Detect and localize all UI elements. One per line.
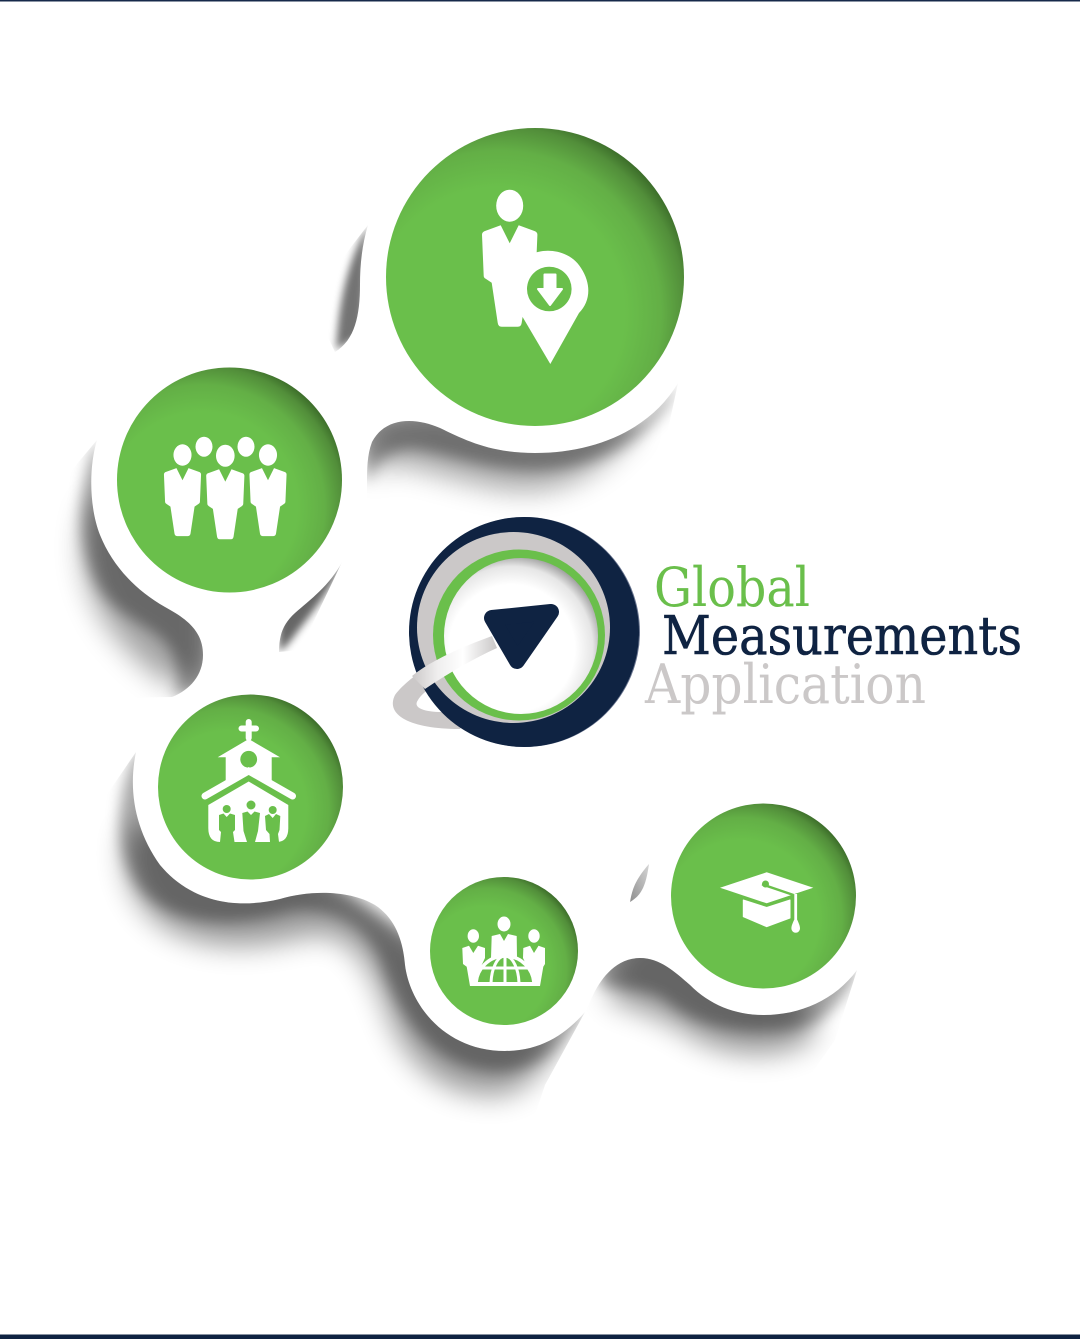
gray ring	[417, 532, 610, 723]
icon: church with congregation	[205, 722, 292, 842]
white inner disc	[444, 558, 598, 714]
panel: top circle, person with location pin	[386, 128, 684, 426]
navy ring	[409, 517, 639, 747]
icon: person with location pin	[482, 190, 588, 364]
swoosh over ring	[412, 636, 497, 689]
panel: left circle, group of people	[117, 368, 342, 592]
word: Measurements: Measurements	[662, 606, 1022, 667]
icon: people around globe	[462, 916, 545, 986]
panel: small circle, meeting around globe	[430, 877, 578, 1025]
word: Application: Application	[644, 653, 926, 716]
green ring	[433, 550, 605, 720]
word: Global: Global	[654, 556, 810, 619]
icon: graduation cap	[720, 872, 813, 933]
title text	[644, 556, 1022, 716]
top border line	[0, 0, 1080, 2]
panel: church circle	[158, 694, 343, 880]
triangle pointer	[492, 612, 551, 661]
paper ribbon shadows	[81, 225, 857, 1095]
swoosh tail behind ring	[393, 637, 494, 729]
bottom border bar	[0, 1334, 1080, 1339]
icon: group of people	[164, 437, 287, 539]
panel: graduation circle	[671, 804, 856, 988]
logo mark	[393, 517, 640, 747]
